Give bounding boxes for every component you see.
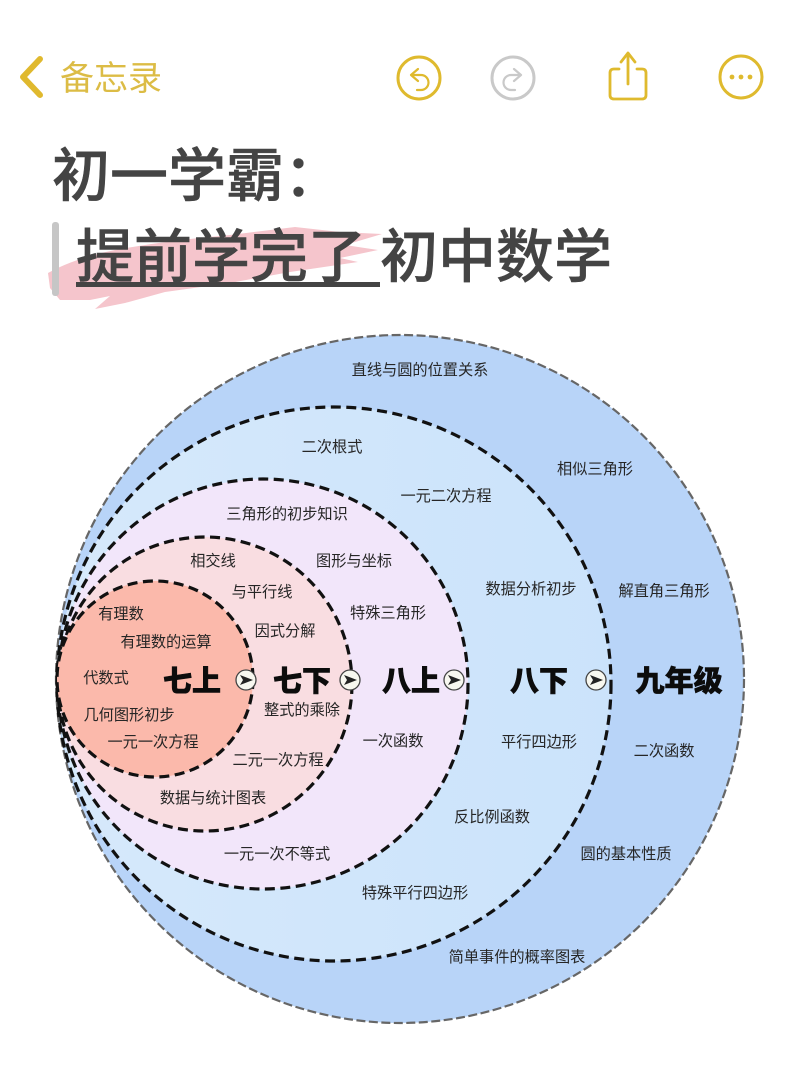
icon: redo — [492, 57, 534, 99]
underline — [76, 282, 380, 287]
topics: 九年级: 圆的基本性质 — [580, 846, 672, 863]
topics: 七上: 几何图形初步 — [83, 707, 175, 724]
topics: 八上: 三角形的初步知识 — [226, 506, 348, 523]
grade labels: 七上 — [163, 665, 221, 698]
icon: share — [610, 53, 646, 99]
topics: 七上: 有理数 — [98, 606, 144, 623]
topics: 九年级: 相似三角形 — [557, 461, 633, 478]
cursor bar — [52, 222, 59, 296]
icon: back chevron — [23, 59, 40, 95]
topics: 七上: 有理数的运算 — [120, 633, 212, 651]
topics: 八下: 数据分析初步 — [485, 581, 577, 598]
arrow 2 — [340, 670, 360, 690]
topics: 七下: 相交线 — [190, 552, 236, 570]
nav bar — [23, 53, 762, 99]
topics: 八下: 特殊平行四边形 — [362, 885, 468, 902]
circle: 七上 — [57, 581, 253, 777]
topics: 八上: 一次函数 — [363, 733, 423, 750]
topics: 八上: 特殊三角形 — [350, 605, 426, 622]
title line 2 block — [48, 222, 612, 309]
topics: 七下: 因式分解 — [255, 623, 315, 640]
topics: 九年级 — [352, 362, 710, 966]
topics: 七上: 一元一次方程 — [107, 734, 199, 751]
topics: 七下 — [160, 552, 340, 807]
icon: more — [720, 56, 762, 98]
arrow 4 — [586, 670, 606, 690]
circle: 八上 — [58, 479, 468, 889]
back label: 备忘录 — [60, 60, 162, 98]
nested circle diagram — [56, 335, 744, 1023]
arrows — [236, 670, 606, 690]
grade labels: 八上 — [382, 665, 440, 698]
grade labels: 七下 — [273, 665, 331, 698]
topics: 七上: 代数式 — [83, 670, 129, 687]
topics: 八下: 反比例函数 — [454, 809, 530, 826]
arrow 1 — [236, 670, 256, 690]
circle: 八下 — [57, 407, 611, 961]
topics: 九年级: 直线与圆的位置关系 — [352, 362, 488, 379]
topics: 七下: 整式的乘除 — [264, 702, 340, 719]
topics: 八下: 平行四边形 — [501, 734, 577, 751]
topics: 八下: 一元二次方程 — [400, 488, 492, 505]
topics: 七下: 二元一次方程 — [232, 752, 324, 769]
topics: 九年级: 简单事件的概率图表 — [449, 949, 585, 966]
topics: 八上: 一元一次不等式 — [224, 845, 330, 863]
topics: 九年级: 解直角三角形 — [618, 583, 710, 600]
grade labels: 八下 — [510, 666, 568, 698]
highlighted title text: 提前学完了 — [76, 225, 366, 290]
grade labels: 九年级 — [635, 664, 723, 698]
grade labels — [163, 664, 723, 698]
topics: 八上 — [224, 506, 426, 863]
topics: 八下 — [302, 439, 577, 902]
topics: 七上 — [83, 606, 212, 751]
circle: 七下 — [58, 537, 352, 831]
arrow 3 — [444, 670, 464, 690]
topics: 八下: 二次根式 — [302, 439, 362, 456]
title line 1: 初一学霸： — [52, 144, 342, 209]
topics: 九年级: 二次函数 — [634, 743, 694, 760]
icon: undo — [398, 57, 440, 99]
pink brush highlight — [48, 227, 382, 309]
topics: 七下: 数据与统计图表 — [160, 790, 266, 807]
topics: 八上: 图形与坐标 — [316, 553, 392, 570]
topics: 七下: 与平行线 — [232, 584, 292, 601]
title remainder: 初中数学 — [380, 225, 612, 290]
circle: 九年级 — [56, 335, 744, 1023]
